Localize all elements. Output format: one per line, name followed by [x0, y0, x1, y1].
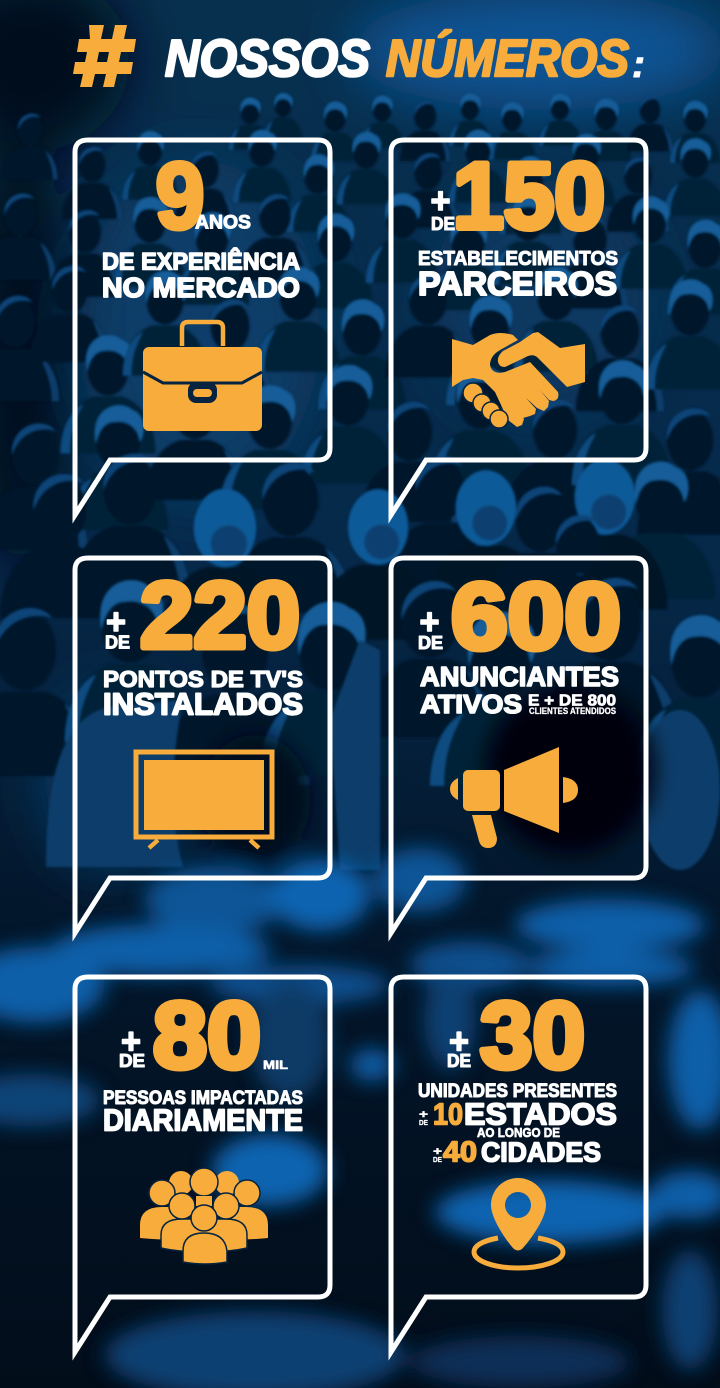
label diariamente: DIARIAMENTE [103, 1102, 303, 1138]
speech bubble [75, 977, 330, 1352]
label de: DE [119, 1051, 145, 1071]
icon: handshake [452, 332, 585, 428]
panel: 30 unidades [391, 977, 646, 1352]
label de: DE [447, 1051, 471, 1071]
plus sign: + [430, 180, 450, 221]
panel: 150 estabelecimentos [391, 140, 646, 515]
label experiencia: DE EXPERIÊNCIA [102, 248, 300, 276]
number 9: 9 [156, 143, 204, 248]
plus sign: + [420, 601, 440, 642]
label e mais de 800: E + DE 800 [528, 692, 616, 710]
label de: DE [105, 632, 130, 652]
panel: 30 unidades: DE [433, 1157, 442, 1164]
number 10: 10 [433, 1096, 463, 1132]
speech bubble [391, 977, 646, 1352]
icon: megaphone [450, 747, 578, 848]
label anunciantes: ANUNCIANTES [420, 661, 619, 692]
label unidades presentes: UNIDADES PRESENTES [418, 1080, 617, 1102]
small plus de 40: + [433, 1146, 442, 1158]
label pessoas impactadas: PESSOAS IMPACTADAS [103, 1088, 303, 1109]
number 220: 220 [140, 562, 300, 668]
label mil: MIL [263, 1058, 288, 1072]
label mercado: NO MERCADO [102, 272, 300, 303]
title colon: : [632, 44, 645, 86]
number 600: 600 [451, 564, 621, 668]
number 30: 30 [480, 982, 585, 1088]
icon: location pin [474, 1178, 563, 1268]
title text: numeros: NÚMEROS [386, 30, 629, 88]
label anos: ANOS [195, 212, 251, 234]
icon: hash [73, 25, 136, 87]
speech bubble [391, 558, 646, 933]
icon: people [140, 1168, 268, 1264]
panel: 30 unidades: DE [419, 1120, 428, 1127]
title [73, 25, 645, 88]
number 40: 40 [443, 1136, 477, 1168]
plus sign: + [449, 1020, 469, 1062]
speech bubble [391, 140, 646, 515]
icon: briefcase [143, 322, 262, 431]
panel: 80 mil pessoas [75, 977, 330, 1352]
panel: 600 anunciantes [391, 558, 646, 933]
plus sign: + [106, 601, 126, 642]
small plus de 10: + [419, 1109, 428, 1121]
label instalados: INSTALADOS [103, 686, 303, 722]
speech bubble [75, 558, 330, 933]
speech bubble [75, 140, 330, 515]
label ativos: ATIVOS [420, 689, 522, 719]
label parceiros: PARCEIROS [418, 265, 617, 302]
label clientes atendidos: CLIENTES ATENDIDOS [529, 706, 616, 716]
label ao longo de: AO LONGO DE [477, 1126, 560, 1140]
number 150: 150 [453, 143, 605, 248]
label de: DE [431, 214, 455, 234]
panel: 9 anos [75, 140, 330, 515]
number 80: 80 [153, 982, 261, 1088]
label de: DE [418, 633, 443, 653]
label cidades: CIDADES [481, 1136, 601, 1168]
icon: tv [136, 752, 272, 848]
label estados: ESTADOS [464, 1096, 617, 1132]
title text: nossos: NOSSOS [165, 30, 370, 88]
label estabelecimentos: ESTABELECIMENTOS [418, 248, 618, 270]
plus sign: + [121, 1020, 141, 1062]
label pontos: PONTOS DE TV'S [103, 666, 303, 692]
panel: 220 pontos de tv [75, 558, 330, 933]
